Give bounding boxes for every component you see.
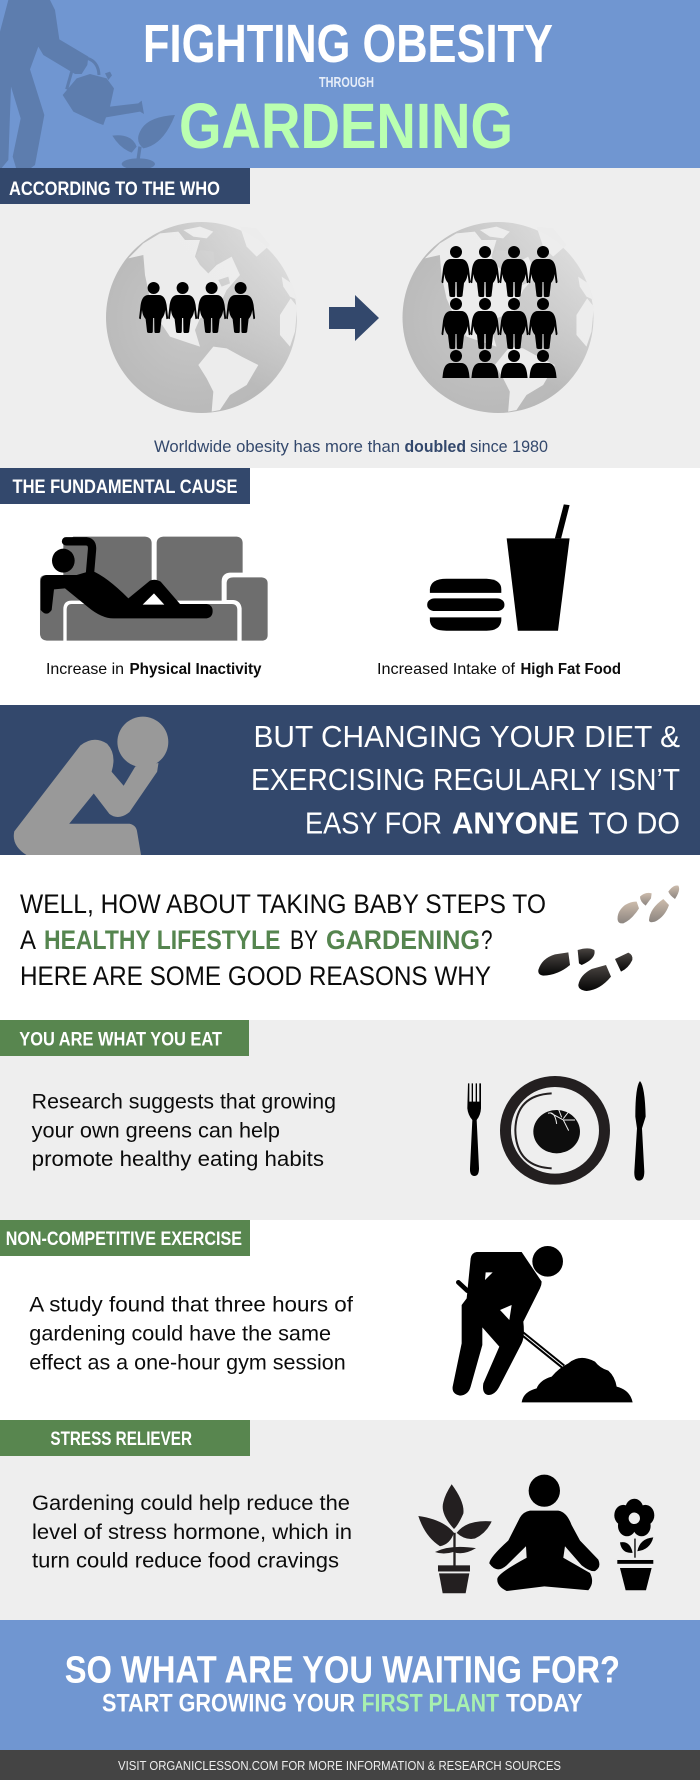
baby steps text: A bbox=[20, 925, 36, 955]
text: gardening versus gym: A study found that three hours of bbox=[29, 1294, 353, 1317]
text: stress hormone: turn could reduce food cravings bbox=[32, 1550, 339, 1573]
panel: call to action bbox=[0, 1620, 700, 1750]
text: gardening versus gym bbox=[29, 1294, 353, 1374]
panel: you are what you eat bbox=[0, 1020, 700, 1220]
title: gardening: GARDENING bbox=[179, 90, 513, 162]
icon: footprints bbox=[538, 885, 679, 991]
section label: non-competitive exercise: NON-COMPETITIVE EXERCISE bbox=[6, 1229, 242, 1250]
section label: you are what you eat bbox=[0, 1020, 249, 1056]
banner text: TO DO bbox=[588, 806, 680, 840]
caption: high fat food: High Fat Food bbox=[520, 661, 621, 678]
caption: worldwide obesity: since 1980 bbox=[470, 437, 548, 456]
caption: worldwide obesity: doubled bbox=[404, 437, 466, 456]
icon: person digging soil bbox=[453, 1246, 633, 1402]
text: healthy eating habits: your own greens can help bbox=[32, 1119, 280, 1142]
subheading: start growing your first plant today: START GROWING YOUR bbox=[102, 1690, 355, 1718]
globe with four people bbox=[106, 222, 298, 414]
title: through: THROUGH bbox=[319, 74, 374, 91]
text: gardening versus gym: gardening could have the same bbox=[29, 1323, 331, 1346]
subheading: start growing your first plant today: TODAY bbox=[506, 1690, 583, 1718]
baby steps text: GARDENING bbox=[326, 925, 480, 955]
text: stress hormone: Gardening could help reduce the bbox=[32, 1492, 350, 1515]
panel: stress reliever bbox=[0, 1420, 700, 1620]
baby steps text: BY bbox=[290, 925, 318, 955]
text: healthy eating habits: promote healthy eating habits bbox=[32, 1148, 324, 1171]
caption: physical inactivity: Increase in bbox=[46, 661, 124, 678]
section label: according to the WHO: ACCORDING TO THE WHO bbox=[9, 179, 220, 200]
baby steps text: ? bbox=[481, 925, 492, 955]
section label: according to the WHO bbox=[0, 168, 250, 204]
icon: person lying on sofa bbox=[40, 537, 268, 641]
banner text: ANYONE bbox=[452, 806, 579, 840]
title: fighting obesity: FIGHTING OBESITY bbox=[143, 14, 553, 74]
icon: potted plant, meditating person and flower bbox=[418, 1475, 654, 1593]
text: stress hormone bbox=[32, 1492, 352, 1573]
panel: header bbox=[0, 0, 700, 170]
globe with twelve people bbox=[402, 222, 594, 414]
section label: the fundamental cause bbox=[0, 468, 250, 504]
section label: stress reliever bbox=[0, 1420, 250, 1456]
caption: high fat food: Increased Intake of bbox=[377, 661, 516, 678]
panel: baby steps bbox=[0, 855, 700, 1020]
subheading: start growing your first plant today: FIRST PLANT bbox=[362, 1690, 499, 1718]
baby steps text: WELL, HOW ABOUT TAKING BABY STEPS TO bbox=[20, 889, 546, 919]
panel: non-competitive exercise bbox=[0, 1220, 700, 1420]
text: gardening versus gym: effect as a one-hour gym session bbox=[29, 1351, 346, 1374]
panel: the fundamental cause bbox=[0, 468, 700, 705]
section label: non-competitive exercise bbox=[0, 1220, 250, 1256]
baby steps text bbox=[20, 889, 546, 991]
section label: you are what you eat: YOU ARE WHAT YOU EAT bbox=[19, 1030, 222, 1051]
icon: gardener watering a seedling bbox=[0, 0, 175, 170]
arrow bbox=[329, 295, 379, 341]
heading: so what are you waiting for: SO WHAT ARE YOU WAITING FOR? bbox=[65, 1649, 620, 1691]
caption: physical inactivity: Physical Inactivity bbox=[130, 661, 262, 678]
banner text: EASY FOR bbox=[305, 806, 442, 840]
panel: banner, changing your diet bbox=[0, 705, 700, 855]
icon: person with head in hands bbox=[14, 717, 168, 855]
banner text: BUT CHANGING YOUR DIET & bbox=[254, 720, 680, 754]
footer bbox=[0, 1750, 700, 1780]
baby steps text: HERE ARE SOME GOOD REASONS WHY bbox=[20, 961, 491, 991]
footer: VISIT ORGANICLESSON.COM FOR MORE INFORMATION & RESEARCH SOURCES bbox=[118, 1758, 561, 1773]
banner text bbox=[251, 720, 680, 840]
panel: according to the WHO bbox=[0, 168, 700, 468]
caption: worldwide obesity: Worldwide obesity has more than bbox=[154, 437, 400, 456]
icon: plate with tomato, fork and knife bbox=[467, 1081, 646, 1181]
text: stress hormone: level of stress hormone, which in bbox=[32, 1521, 352, 1544]
caption: high fat food bbox=[377, 661, 621, 678]
icon: burger and drink bbox=[427, 504, 570, 631]
text: healthy eating habits bbox=[32, 1090, 336, 1171]
text: healthy eating habits: Research suggests that growing bbox=[32, 1090, 336, 1113]
baby steps text: HEALTHY LIFESTYLE bbox=[44, 925, 280, 955]
caption: worldwide obesity bbox=[154, 437, 548, 456]
section label: stress reliever: STRESS RELIEVER bbox=[50, 1429, 192, 1450]
caption: physical inactivity bbox=[46, 661, 262, 678]
subheading: start growing your first plant today bbox=[102, 1690, 583, 1718]
section label: the fundamental cause: THE FUNDAMENTAL CAUSE bbox=[12, 477, 238, 498]
